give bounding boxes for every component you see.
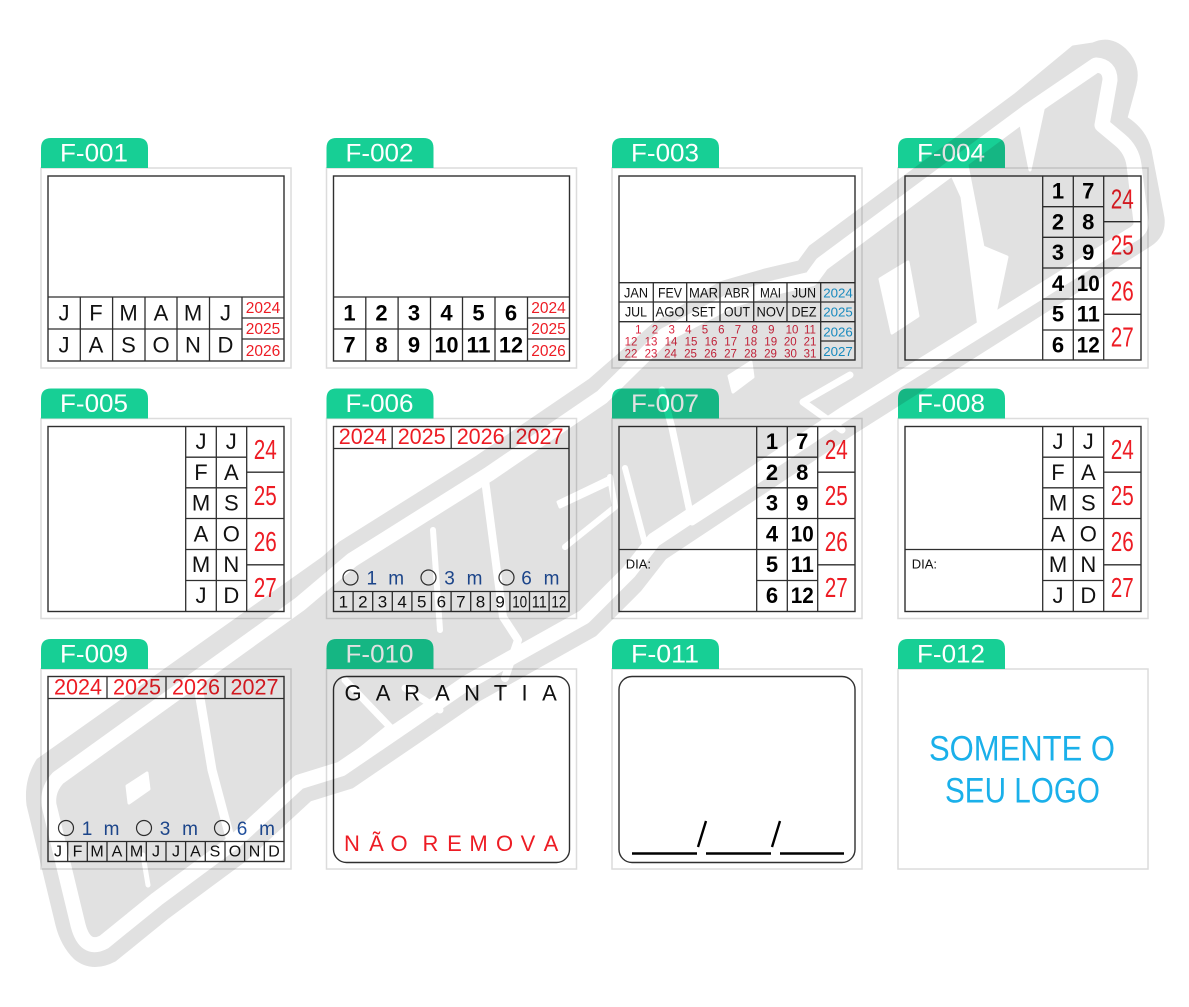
label grid: numbered months and years column: 9 [1082, 240, 1094, 265]
label grid: day field, numbered months and years: 26 [825, 526, 848, 557]
label grid: lettered months and years column: 27 [254, 572, 277, 603]
label grid: numbered months and years column: 4 [1052, 271, 1065, 296]
label grid: month names, days and years: JUN [792, 284, 816, 300]
label grid: numbered months and years column: 2 [1052, 209, 1064, 234]
watermark counter: letter b [880, 262, 918, 333]
tab: F-011: F-011 [631, 640, 699, 668]
label grid: day field, numbered months and years: 6 [766, 583, 778, 608]
label grid: numbered months and years column: 12 [1077, 333, 1100, 358]
label grid: years, periods and lettered months: 1 [82, 819, 92, 840]
label grid: month names, days and years: 15 [685, 336, 697, 348]
label grid: month names, days and years: 25 [684, 349, 697, 361]
label grid: day field, numbered months and years: 1 [766, 429, 778, 454]
tab: F-009 [41, 639, 148, 669]
label grid: day field, numbered months and years: 8 [796, 460, 808, 485]
label grid: month names, days and years: 28 [744, 349, 757, 361]
tab: F-008 [898, 388, 1005, 418]
label grid: numbered months and years column: 26 [1111, 276, 1134, 307]
label grid: months and years: M [119, 301, 138, 326]
label grid: years, periods and lettered months: 2024 [54, 674, 102, 699]
label grid: years, periods and lettered months: J [54, 844, 62, 861]
label grid: years, periods and numbered months: 6 [521, 568, 532, 589]
label grid: day field, lettered months and years: M [1049, 552, 1067, 577]
panel: F-006 [326, 388, 576, 618]
label grid: month names, days and years: 16 [705, 336, 717, 348]
label grid: lettered months and years column: O [223, 522, 240, 546]
label grid: years, periods and lettered months: M [130, 844, 143, 861]
label grid: months and years: F [89, 301, 103, 326]
label grid: numbered months and years: 9 [408, 333, 420, 358]
rounded label with warranty text: A [542, 681, 557, 706]
label grid: numbered months and years column [905, 176, 1141, 360]
watermark counter: letter e [729, 362, 753, 392]
label grid: lettered months and years column: M [192, 552, 210, 577]
label grid: lettered months and years column: J [196, 429, 206, 454]
label grid: years, periods and numbered months [334, 424, 569, 612]
label grid: day field, numbered months and years: 9 [796, 490, 808, 516]
label grid: month names, days and years: 12 [625, 336, 637, 348]
label grid: years, periods and lettered months [48, 674, 284, 862]
label grid: month names, days and years: 22 [625, 349, 637, 361]
label grid: years, periods and numbered months: m [467, 568, 482, 589]
tab: F-005 [41, 388, 148, 418]
label grid: numbered months and years: 2026 [531, 343, 566, 360]
rounded label with warranty text: O [390, 831, 408, 856]
label grid: lettered months and years column: F [194, 460, 208, 485]
rounded label with warranty text: R [404, 681, 420, 706]
label grid: years, periods and lettered months: m [182, 819, 198, 840]
label grid: month names, days and years: ABR [724, 284, 750, 300]
label grid: day field, numbered months and years: 12 [791, 583, 814, 608]
label grid: months and years: J [58, 333, 70, 358]
label grid: years, periods and numbered months: m [388, 568, 404, 589]
label grid: years, periods and numbered months: 8 [476, 593, 485, 612]
rounded label with date lines [619, 676, 855, 862]
label grid: months and years: A [89, 333, 104, 358]
label grid: numbered months and years [334, 176, 570, 361]
label grid: months and years: S [121, 333, 136, 358]
label grid: lettered months and years column: 24 [254, 434, 277, 465]
tab: F-008: F-008 [917, 390, 985, 418]
label grid: numbered months and years column: 8 [1082, 209, 1094, 234]
label grid: years, periods and lettered months: M [90, 844, 104, 861]
label grid: years, periods and numbered months: 3 [378, 593, 387, 612]
label grid: month names, days and years: 29 [764, 349, 777, 361]
label grid: lettered months and years column: A [194, 522, 209, 546]
label grid: numbered months and years: 11 [466, 333, 490, 358]
tab: F-002: F-002 [346, 140, 414, 168]
label grid: lettered months and years column [48, 426, 284, 612]
label grid: years, periods and lettered months: 6 [237, 819, 247, 840]
tab: F-012: F-012 [917, 640, 985, 668]
label grid: lettered months and years column: D [223, 583, 239, 608]
label grid: years, periods and lettered months: 2027 [230, 674, 278, 699]
label grid: numbered months and years column: 10 [1077, 271, 1100, 296]
label grid: years, periods and lettered months: S [210, 844, 220, 861]
label grid: numbered months and years: 10 [434, 333, 458, 358]
panel: F-005 [41, 388, 291, 618]
label grid: numbered months and years: 3 [408, 301, 420, 326]
rounded label with warranty text [334, 676, 570, 862]
label grid: month names, days and years: OUT [724, 304, 750, 320]
label grid: years, periods and numbered months: 2025 [398, 424, 446, 449]
label grid: month names, days and years: 2024 [823, 285, 853, 300]
label grid: month names, days and years: JAN [624, 284, 648, 300]
label grid: day field, lettered months and years: A [1081, 460, 1096, 485]
rounded label with warranty text: E [447, 831, 462, 856]
label grid: month names, days and years: 14 [665, 336, 678, 348]
label grid: month names, days and years: 6 [718, 324, 725, 336]
label grid: lettered months and years column: A [224, 460, 239, 485]
rounded label with warranty text: T [494, 681, 507, 706]
label grid: numbered months and years column: 6 [1052, 333, 1064, 358]
panel: F-004 [898, 138, 1148, 368]
rounded label with warranty text: G [345, 681, 362, 706]
label grid: lettered months and years column: N [223, 552, 239, 577]
panel: F-011 [612, 639, 862, 869]
label grid: day field, lettered months and years: S [1081, 490, 1096, 516]
tab: F-006 [326, 388, 434, 418]
logo-only text [929, 730, 1115, 810]
label grid: day field, numbered months and years: 24 [825, 434, 848, 465]
label grid: years, periods and lettered months: N [249, 844, 260, 861]
label grid: day field, lettered months and years: D [1080, 583, 1096, 608]
label grid: months and years: J [220, 301, 231, 326]
label grid: month names, days and years: 8 [751, 324, 758, 336]
label grid: numbered months and years column: 24 [1111, 183, 1134, 214]
label grid: lettered months and years column: 25 [254, 480, 277, 511]
label grid: years, periods and numbered months: 1 [339, 593, 348, 612]
label grid: numbered months and years: 2 [375, 301, 388, 326]
label grid: years, periods and lettered months: J [172, 844, 180, 861]
label grid: month names, days and years: JUL [625, 304, 647, 320]
label grid: day field, lettered months and years: F [1051, 460, 1065, 485]
label grid: lettered months and years column: J [196, 583, 206, 608]
label grid: month names, days and years: 11 [804, 324, 816, 336]
label grid: numbered months and years: 7 [343, 333, 356, 358]
label grid: month names, days and years: 20 [784, 336, 797, 348]
tab: F-007 [612, 388, 719, 418]
label grid: months and years: 2024 [246, 300, 281, 317]
panel: F-010 [326, 639, 576, 869]
rounded label with warranty text: I [521, 681, 528, 706]
panel: F-007 [612, 388, 862, 618]
panel: F-012 [898, 639, 1148, 869]
label grid: years, periods and numbered months: 7 [456, 593, 466, 612]
label grid: years, periods and numbered months: 6 [437, 593, 446, 612]
panel: F-002 [326, 138, 576, 368]
label grid: month names, days and years: 23 [645, 349, 657, 361]
label grid: lettered months and years column: J [226, 429, 237, 454]
label grid: years, periods and lettered months: m [259, 819, 275, 840]
label grid: years, periods and lettered months: m [104, 819, 119, 840]
label grid: month names, days and years: 26 [704, 349, 717, 361]
label grid: day field, lettered months and years: 24 [1111, 434, 1134, 465]
panel: F-001 [41, 138, 291, 368]
label grid: numbered months and years: 2025 [531, 321, 566, 338]
label grid: lettered months and years column: S [224, 490, 239, 516]
label grid: years, periods and numbered months: 2024 [339, 424, 387, 449]
label grid: month names, days and years: MAI [760, 284, 781, 300]
label grid: day field, numbered months and years: 10 [791, 522, 814, 546]
label grid: month names, days and years: 19 [764, 336, 777, 348]
label grid: numbered months and years column: 3 [1052, 240, 1064, 265]
tab: F-004 [898, 138, 1005, 168]
tab: F-012 [898, 639, 1005, 669]
label grid: month names, days and years: FEV [658, 284, 683, 300]
label grid: month names, days and years: 5 [702, 324, 708, 336]
label grid: numbered months and years column: 11 [1077, 302, 1100, 327]
label grid: month names, days and years: SET [692, 304, 716, 320]
label grid: month names, days and years [619, 176, 855, 361]
label grid: month names, days and years: 30 [784, 349, 797, 361]
label grid: years, periods and lettered months: A [112, 844, 123, 861]
label grid: months and years: 2025 [246, 321, 280, 338]
label grid: month names, days and years: 17 [724, 336, 737, 348]
tab: F-004: F-004 [917, 140, 985, 168]
label grid: month names, days and years: 2025 [823, 305, 853, 320]
label grid: month names, days and years: 7 [735, 324, 741, 336]
label grid: numbered months and years column: 5 [1052, 302, 1064, 327]
panel: F-009 [41, 639, 291, 869]
tab: F-003: F-003 [631, 140, 699, 168]
label grid: years, periods and numbered months: 1 [367, 568, 377, 589]
label grid: months and years: M [184, 301, 202, 326]
label grid: years, periods and numbered months: 3 [444, 568, 455, 589]
watermark gap: between b and x [952, 165, 1007, 335]
label grid: months and years: D [218, 333, 233, 358]
label grid: day field, lettered months and years: DIA: [912, 556, 937, 572]
label grid: months and years: A [154, 301, 169, 326]
label grid: day field, lettered months and years: J [1052, 583, 1064, 608]
label grid: years, periods and lettered months: O [229, 844, 241, 861]
label grid: day field, lettered months and years [905, 426, 1141, 612]
rounded label with warranty text: O [496, 831, 513, 856]
rounded label with warranty text: V [521, 831, 536, 856]
label grid: day field, numbered months and years [619, 426, 855, 612]
label grid: years, periods and numbered months: 2026 [457, 424, 505, 449]
label grid: months and years: J [58, 301, 70, 326]
label grid: month names, days and years: 31 [804, 349, 816, 361]
panel: F-003 [612, 138, 862, 368]
label grid: day field, numbered months and years: 7 [796, 429, 808, 454]
rounded label with warranty text: A [435, 681, 450, 706]
label grid: years, periods and numbered months: 9 [495, 593, 505, 612]
watermark wedge: letter x [1021, 105, 1044, 170]
tab: F-010: F-010 [346, 640, 414, 668]
label grid: numbered months and years: 8 [375, 333, 388, 358]
label grid: years, periods and numbered months: m [544, 568, 559, 589]
label grid: years, periods and numbered months: 2 [358, 593, 368, 612]
label grid: day field, numbered months and years: 11 [791, 552, 814, 577]
label grid: day field, lettered months and years: 25 [1111, 480, 1134, 511]
rounded label with warranty text: N [464, 681, 480, 706]
label grid: months and years [48, 176, 284, 361]
label grid: day field, numbered months and years: 25 [825, 480, 848, 511]
label grid: numbered months and years: 1 [343, 301, 356, 326]
label grid: month names, days and years: 21 [804, 336, 816, 348]
label grid: month names, days and years: MAR [689, 284, 718, 300]
label grid: years, periods and numbered months: 10 [512, 593, 527, 612]
watermark counter: letter a [127, 773, 149, 803]
label grid: month names, days and years: 10 [786, 324, 798, 336]
label grid: lettered months and years column: 26 [254, 526, 277, 557]
rounded label with warranty text: Ã [369, 831, 384, 856]
label grid: month names, days and years: DEZ [792, 304, 817, 320]
label grid: day field, lettered months and years: M [1049, 490, 1067, 516]
label grid: months and years: O [152, 333, 170, 358]
label grid: month names, days and years: 3 [668, 324, 675, 336]
label grid: day field, lettered months and years: 26 [1111, 526, 1134, 557]
label grid: months and years: 2026 [246, 343, 280, 360]
logo-only text: SOMENTE O [929, 730, 1115, 768]
label grid: numbered months and years column: 25 [1111, 229, 1134, 260]
label grid: month names, days and years: 18 [744, 336, 757, 348]
label grid: day field, numbered months and years: 5 [766, 552, 778, 577]
label grid: numbered months and years column: 27 [1111, 322, 1134, 353]
label grid: day field, lettered months and years: O [1080, 522, 1097, 546]
tab: F-009: F-009 [60, 640, 128, 668]
label grid: month names, days and years: AGO [656, 304, 685, 320]
watermark bar: letter t [558, 478, 609, 507]
label grid: years, periods and lettered months: 2025 [113, 674, 161, 699]
label grid: month names, days and years: 4 [685, 324, 692, 336]
tab: F-001 [41, 138, 148, 168]
label grid: years, periods and lettered months: 3 [160, 819, 170, 840]
label grid: years, periods and lettered months: D [268, 844, 280, 861]
logo-only text: SEU LOGO [945, 772, 1100, 810]
rounded label with warranty text: A [544, 831, 559, 856]
panel: F-008 [898, 388, 1148, 618]
label grid: years, periods and numbered months: 5 [417, 593, 426, 612]
label grid: month names, days and years: 2026 [823, 325, 853, 340]
label grid: month names, days and years: 1 [635, 324, 642, 336]
label grid: years, periods and numbered months: 11 [532, 593, 547, 612]
label grid: day field, numbered months and years: DIA: [626, 556, 651, 572]
label grid: month names, days and years: 13 [645, 336, 657, 348]
label grid: month names, days and years: 2 [652, 324, 658, 336]
label grid: years, periods and numbered months: 4 [397, 593, 407, 612]
label grid: numbered months and years: 2024 [531, 300, 566, 317]
label grid: month names, days and years: 24 [664, 349, 677, 361]
label grid: numbered months and years column: 1 [1052, 178, 1064, 203]
label grid: numbered months and years: 4 [440, 301, 453, 326]
label grid: years, periods and lettered months: F [73, 844, 83, 861]
label grid: lettered months and years column: M [192, 490, 210, 516]
tab: F-001: F-001 [60, 140, 128, 168]
label grid: numbered months and years: 6 [505, 301, 517, 326]
tab: F-005: F-005 [60, 390, 128, 418]
label grid: years, periods and lettered months: J [152, 844, 160, 861]
label grid: months and years: N [185, 333, 201, 358]
label grid: month names, days and years: 27 [724, 349, 737, 361]
label grid: day field, lettered months and years: 27 [1111, 572, 1134, 603]
rounded label with warranty text: A [376, 681, 391, 706]
rounded label with warranty text: M [469, 831, 488, 856]
label grid: day field, lettered months and years: J [1083, 429, 1094, 454]
tab: F-003 [612, 138, 719, 168]
label grid: numbered months and years: 5 [472, 301, 485, 326]
label grid: numbered months and years column: 7 [1082, 178, 1094, 203]
label grid: day field, lettered months and years: J [1052, 429, 1064, 454]
tab: F-006: F-006 [346, 390, 414, 418]
tab: F-002 [326, 138, 434, 168]
label grid: day field, lettered months and years: A [1051, 522, 1066, 546]
label grid: numbered months and years: 12 [499, 333, 523, 358]
rounded label with warranty text: N [344, 831, 360, 856]
label grid: years, periods and numbered months: 2027 [516, 424, 564, 449]
tab: F-010 [326, 639, 434, 669]
label grid: years, periods and lettered months: A [190, 844, 201, 861]
label grid: month names, days and years: 9 [768, 324, 775, 336]
label grid: day field, numbered months and years: 4 [766, 522, 779, 546]
tab: F-011 [612, 639, 719, 669]
label grid: day field, numbered months and years: 2 [766, 460, 778, 485]
rounded label with warranty text: R [423, 831, 438, 856]
tab: F-007: F-007 [631, 390, 699, 418]
label grid: years, periods and numbered months: 12 [551, 593, 566, 612]
label grid: day field, numbered months and years: 3 [766, 490, 778, 516]
label grid: month names, days and years: 2027 [823, 344, 853, 359]
label grid: years, periods and lettered months: 2026 [172, 674, 220, 699]
label grid: day field, lettered months and years: N [1080, 552, 1096, 577]
label grid: month names, days and years: NOV [756, 304, 785, 320]
label grid: day field, numbered months and years: 27 [825, 572, 848, 603]
